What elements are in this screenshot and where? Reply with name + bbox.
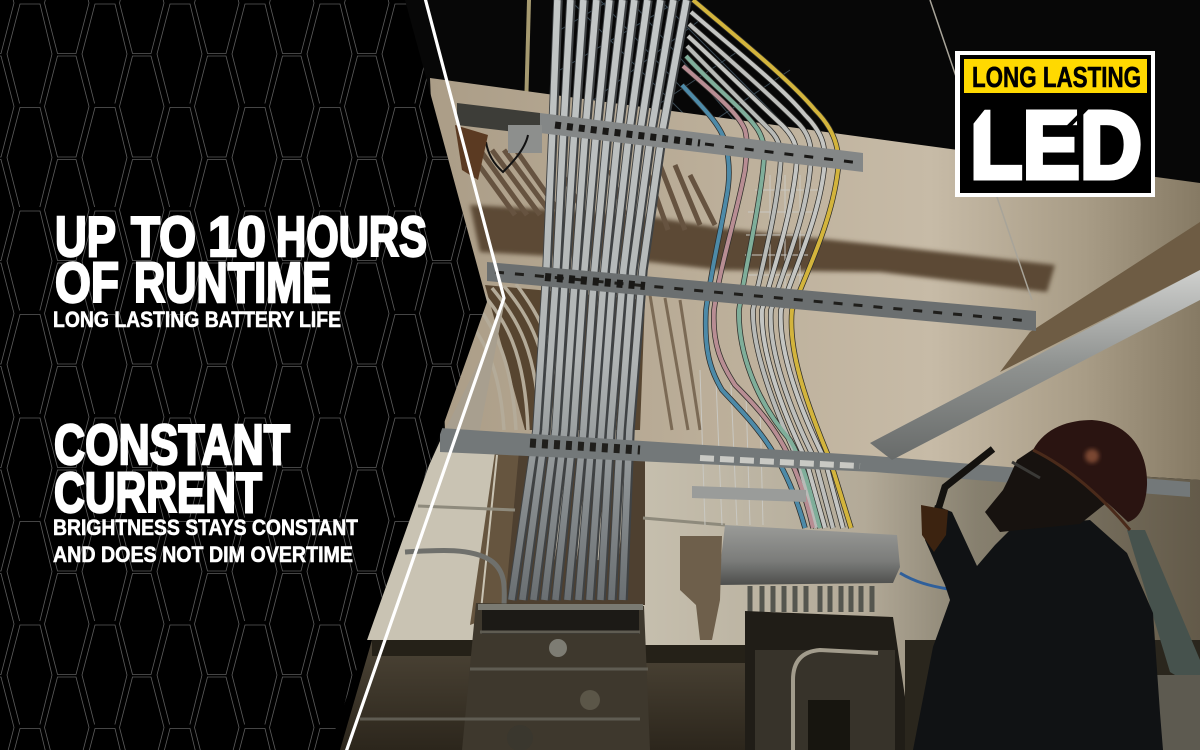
ceiling cable tray mesh: [560, 0, 800, 150]
pale strip between divider and shadow: [445, 300, 505, 430]
junction gutter box: [718, 525, 900, 585]
flashlight: [938, 449, 993, 510]
left black panel with hexagon pattern: [0, 0, 487, 750]
body silhouette: [913, 505, 1163, 750]
lower right panel: [745, 611, 913, 750]
photo: electrician inspecting conduit: [340, 0, 1200, 750]
shadow below middle rail: [485, 285, 645, 430]
shadow band across wall: [470, 205, 1055, 292]
light gaps between lower pipes: [553, 455, 627, 560]
cable tray mesh: [700, 175, 820, 525]
badge: long lasting LED: LONG LASTING: [972, 62, 1141, 94]
helmet brim: [1033, 450, 1130, 530]
gutter wall shadow: [680, 536, 722, 640]
metal flex line: [418, 506, 515, 510]
brown stripes right of pipes: [650, 295, 700, 430]
heading: constant current: CURRENT: [54, 461, 262, 525]
short strut near gutter: [692, 486, 806, 502]
soffit wedge: [1000, 222, 1200, 372]
light curved stripes on shadow: [460, 284, 624, 430]
dark horizontal channel: [372, 640, 745, 663]
heading: up to 10 hours of runtime: RUNTIME: [134, 251, 331, 315]
white chevron divider: [346, 0, 504, 750]
diagonal silver beam: [870, 270, 1200, 460]
heading: up to 10 hours of runtime: TO: [131, 205, 196, 269]
glasses: [1012, 462, 1040, 478]
heading: up to 10 hours of runtime: 10: [208, 205, 266, 269]
brown pouch: [455, 125, 488, 180]
lower wall right: [640, 445, 1200, 750]
helmet: [1033, 420, 1147, 522]
subtext: brightness stays constant: AND DOES NOT DIM OVERTIME: [53, 542, 353, 567]
subtext: long lasting battery life: LONG LASTING BATTERY LIFE: [53, 307, 341, 332]
yellow flex conduit from ceiling: [526, 0, 529, 110]
heading: up to 10 hours of runtime: UP: [55, 205, 116, 269]
upper wall: [430, 78, 1200, 480]
middle strut rail: [487, 262, 1036, 331]
hanging wire: [930, 0, 1032, 300]
metal flex line right: [643, 518, 725, 525]
cable label plate: [1153, 675, 1200, 750]
lower right fade: [905, 640, 1200, 750]
thin conduit bundle: [682, 0, 851, 528]
fittings below gutter: [750, 586, 872, 612]
helmet highlight: [1085, 449, 1099, 463]
heading: constant current: [54, 413, 290, 525]
hand with orange grip: [921, 505, 948, 552]
lower wall left cream: [350, 430, 530, 640]
badge: long lasting LED: [955, 51, 1155, 199]
subtext: brightness stays constant: [53, 515, 358, 567]
main conduit bundle: [511, 0, 687, 600]
flexible cable: [405, 550, 504, 605]
heading: up to 10 hours of runtime: HOURS: [276, 205, 427, 269]
heading: up to 10 hours of runtime: OF: [55, 251, 119, 315]
badge: long lasting LED: LED: [970, 92, 1142, 199]
upper strut rail: [457, 103, 863, 172]
brown shadow strips left of pipes: [470, 440, 645, 625]
wall junction box with cord: [486, 125, 542, 172]
face and beard: [985, 448, 1110, 532]
electrician: [913, 420, 1163, 750]
lower strut rail: [440, 428, 1190, 497]
floor band bottom left: [340, 640, 480, 750]
heading: constant current: CONSTANT: [54, 413, 290, 477]
floor band middle: [640, 645, 750, 750]
lower left panel: [360, 603, 650, 750]
subtext: brightness stays constant: BRIGHTNESS STAYS CONSTANT: [53, 515, 358, 540]
heading: up to 10 hours of runtime: [55, 205, 427, 315]
far right strut leg: [1127, 530, 1200, 690]
blue cable: [900, 573, 948, 589]
diagonal shadow stripes: [468, 150, 715, 230]
